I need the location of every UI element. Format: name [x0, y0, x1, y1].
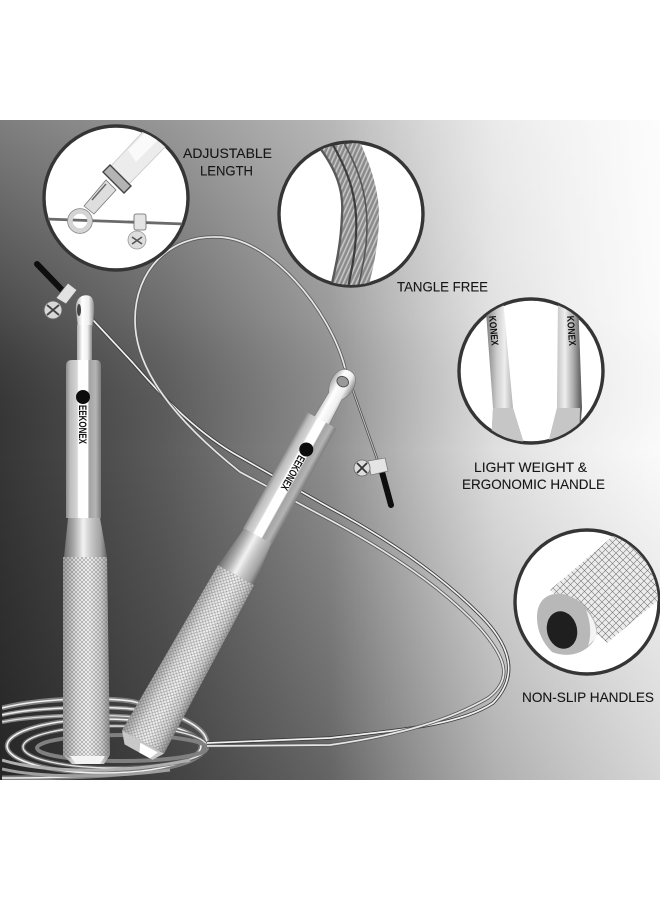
collar: [64, 518, 107, 557]
logo badge: [76, 390, 90, 404]
swivel head: [76, 295, 94, 330]
detail: twisted steel cable: [320, 142, 379, 288]
detail: left handle tube: [486, 305, 523, 442]
label: non-slip handles: NON-SLIP HANDLES: [522, 690, 654, 705]
tube: [66, 360, 101, 518]
neck: [77, 325, 92, 361]
brand text: EEKONEX: [278, 453, 307, 493]
label: light weight and ergonomic handle: LIGHT WEIGHT &: [474, 460, 587, 475]
detail: brand marks: KONEX: [486, 315, 500, 346]
detail: end cap: [537, 594, 597, 655]
label: adjustable length: LENGTH: [200, 164, 253, 178]
detail: knurled barrel: [550, 530, 660, 643]
callout circle: non-slip handles: [515, 530, 660, 674]
adjuster clamp and screw: [44, 283, 77, 319]
label: tangle free: TANGLE FREE: [397, 280, 488, 294]
knurled grip: [117, 563, 257, 763]
black rope tip: [37, 264, 62, 290]
black tip and screw of right handle: [354, 458, 391, 505]
detail: wire and clamp: [46, 219, 184, 224]
left handle: [37, 264, 110, 764]
gradient backdrop panel: [0, 120, 660, 780]
rope tail of right handle: [345, 368, 381, 470]
rope wire: [93, 237, 509, 746]
detail: handle end: [111, 132, 166, 184]
rope coil on the floor: [2, 699, 207, 778]
callout circle: light weight handle: [459, 298, 603, 444]
brand text: EEKONEX: [76, 405, 88, 444]
label: light weight and ergonomic handle: [462, 460, 605, 492]
right handle: [117, 359, 370, 763]
label: adjustable length: [183, 146, 272, 178]
callout circle: adjustable length: [44, 122, 188, 270]
detail: eyelet neck: [84, 180, 116, 214]
knurled grip: [63, 557, 110, 764]
neck and swivel head: [311, 365, 360, 428]
callout circle: tangle free: [279, 142, 423, 288]
logo badge: [297, 440, 316, 459]
detail: right handle tube: [549, 305, 582, 440]
label: light weight and ergonomic handle: ERGONOMIC HANDLE: [462, 477, 605, 492]
callout circle: light weight handle: KONEX: [564, 315, 577, 346]
label: adjustable length: ADJUSTABLE: [183, 146, 272, 161]
collar: [218, 526, 276, 585]
tube: [243, 412, 336, 545]
detail: hole: [546, 611, 578, 649]
